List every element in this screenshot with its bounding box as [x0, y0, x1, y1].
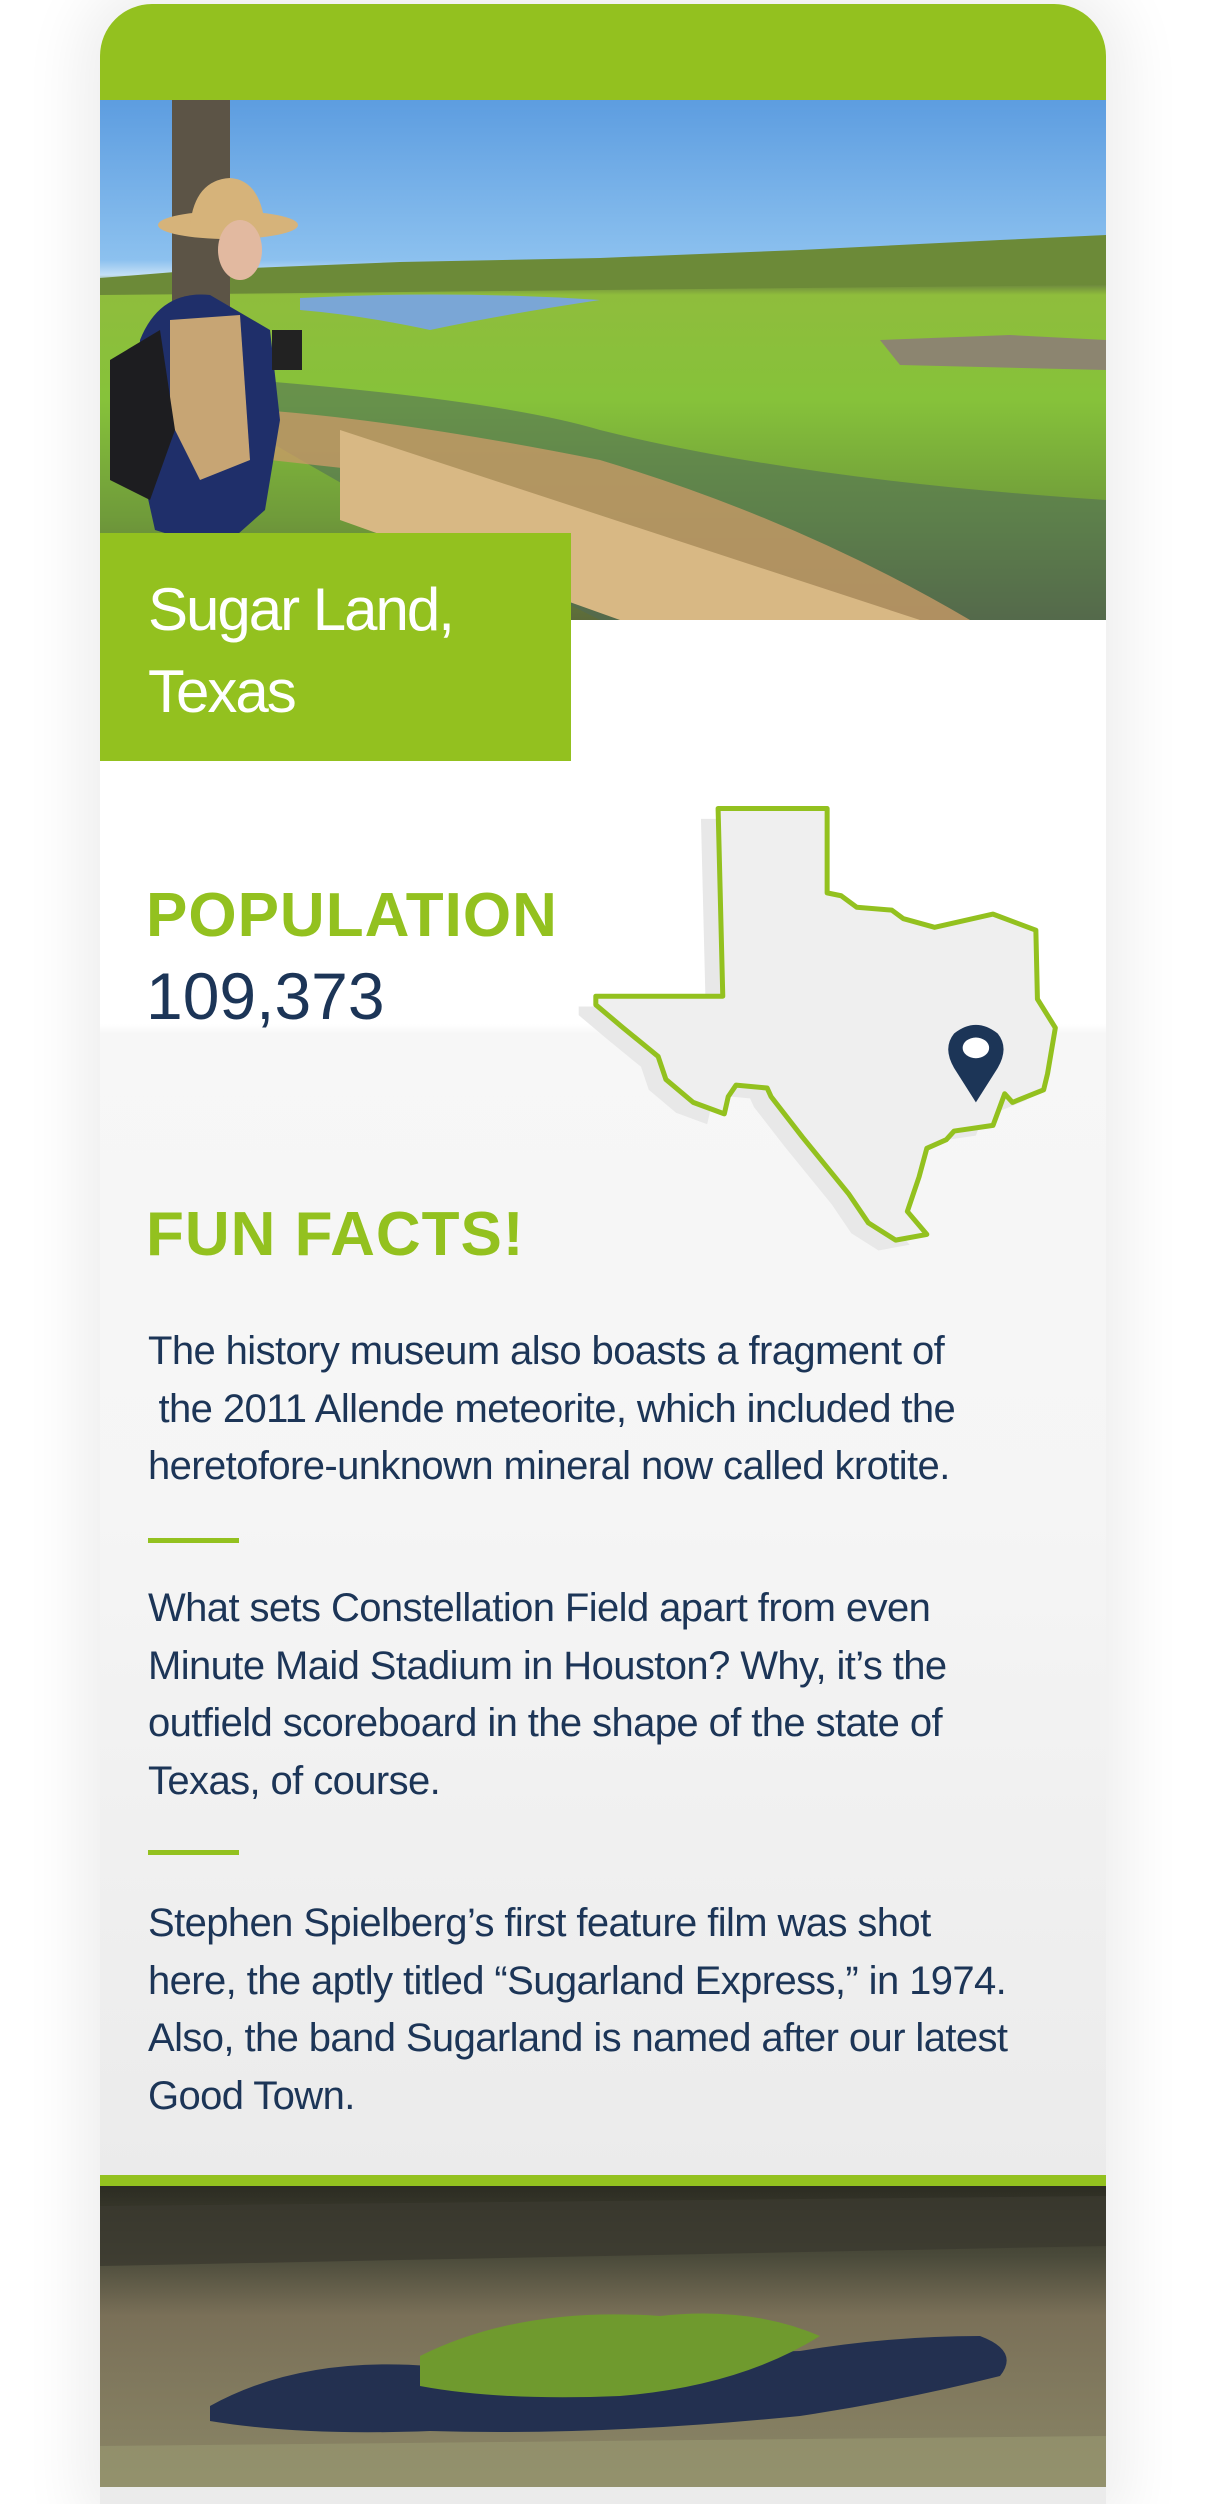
- fact 3: Also, the band Sugarland is named after our latest: [148, 2016, 1007, 2060]
- fact 2: What sets Constellation Field apart from even: [148, 1586, 930, 1630]
- texas map with pin: [578, 806, 1058, 1250]
- fact 2: [148, 1586, 947, 1802]
- green divider above bottom photo: [100, 2175, 1106, 2186]
- pin: [948, 1025, 1004, 1102]
- fact 1: [148, 1329, 955, 1488]
- fun facts heading: FUN FACTS!: [146, 1200, 525, 1269]
- title text: Texas: [148, 658, 295, 725]
- fact 2: Minute Maid Stadium in Houston? Why, it’s the: [148, 1644, 947, 1688]
- fact 2: outfield scoreboard in the shape of the state of: [148, 1701, 942, 1745]
- population heading: POPULATION: [146, 881, 558, 950]
- fact 1: heretofore-unknown mineral now called krotite.: [148, 1444, 950, 1488]
- fact 3: Good Town.: [148, 2074, 355, 2118]
- fact 3: here, the aptly titled “Sugarland Express,” in 1974.: [148, 1958, 1006, 2002]
- title text: [148, 576, 453, 725]
- fact 1: The history museum also boasts a fragment of: [148, 1329, 944, 1373]
- title text: Sugar Land,: [148, 576, 453, 643]
- bottom photo: alligator: [100, 2186, 1106, 2487]
- fact 1: the 2011 Allende meteorite, which included the: [158, 1386, 955, 1430]
- population number: 109,373: [146, 959, 385, 1033]
- top photo: birdwatcher at marsh: [100, 100, 1106, 620]
- fact 2: Texas, of course.: [148, 1758, 440, 1802]
- title box: [100, 533, 571, 761]
- green top bar: [100, 4, 1106, 100]
- fact 3: [148, 1901, 1008, 2118]
- fact 3: Stephen Spielberg’s first feature film was shot: [148, 1901, 931, 1945]
